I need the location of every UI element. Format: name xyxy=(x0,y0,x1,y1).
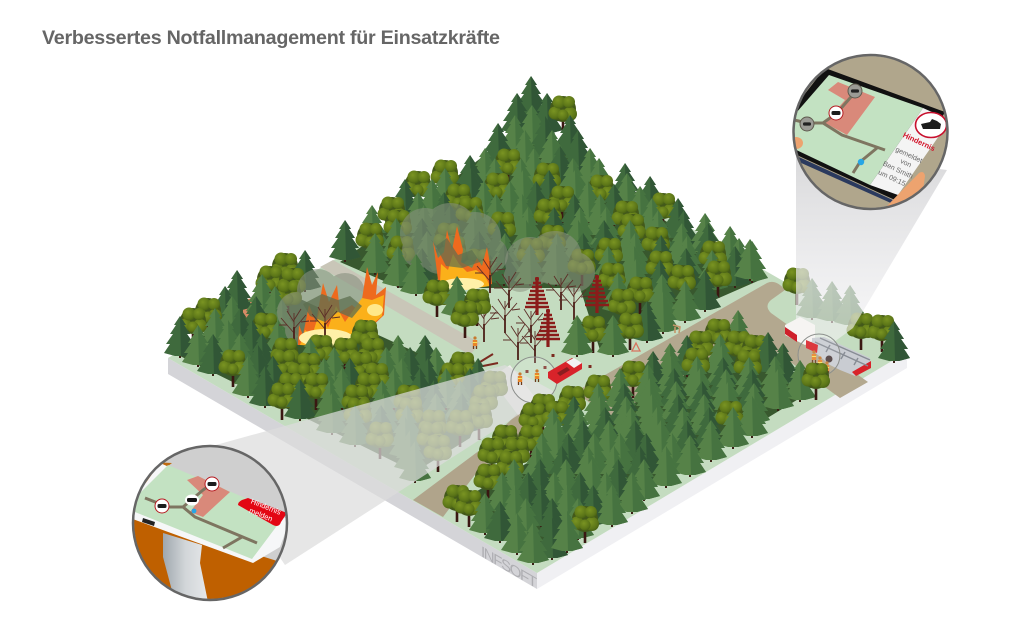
sleeve xyxy=(134,520,276,599)
routes xyxy=(796,96,886,174)
forest: front xyxy=(442,310,830,565)
forest underlay xyxy=(178,120,805,560)
report button: melden xyxy=(248,506,274,523)
building xyxy=(187,476,230,517)
panel text: gemeldet xyxy=(894,146,923,165)
forest: right corner xyxy=(782,268,910,363)
house roof in forest xyxy=(243,298,258,320)
road: south-west xyxy=(413,395,545,517)
fire: left xyxy=(298,267,386,347)
ridge path xyxy=(320,260,480,355)
road: junction xyxy=(490,365,537,415)
panel text: Ben Smith xyxy=(882,161,914,181)
obstacle icon xyxy=(916,112,946,138)
route markers xyxy=(800,84,864,165)
marker: warning triangle xyxy=(632,343,640,351)
magnifier: engine xyxy=(798,334,840,376)
title: Verbessertes Notfallmanagement für Einsatzkräfte xyxy=(42,27,500,49)
panel text xyxy=(878,132,935,186)
info panel xyxy=(870,108,950,195)
smoke cloud: clearing xyxy=(504,231,595,292)
clearing: red dead conifers xyxy=(525,275,609,347)
panel text: Hindernis xyxy=(901,130,937,153)
magnifier: clearing xyxy=(511,357,557,403)
smoke cloud: right fire xyxy=(400,203,508,275)
tablet body xyxy=(790,68,945,200)
magnifier: tablet xyxy=(794,56,946,208)
panel text: um 09:15 xyxy=(877,169,906,188)
fire engine with ladder xyxy=(785,317,871,376)
platform base xyxy=(168,140,907,589)
forest: left, behind fire xyxy=(164,250,321,367)
tablet edge xyxy=(799,157,893,203)
building xyxy=(825,82,875,135)
magnifier ring: tablet xyxy=(794,55,948,209)
panel text: von xyxy=(899,158,912,169)
route markers xyxy=(155,477,219,513)
clearing: green trees xyxy=(400,254,593,357)
strap xyxy=(163,533,208,602)
phone screen xyxy=(130,465,285,559)
burnt trees at left fire xyxy=(279,305,340,345)
map screen xyxy=(790,75,923,185)
clearing: fallen logs, stumps xyxy=(480,354,590,373)
fire: right xyxy=(433,226,492,290)
routes xyxy=(145,480,257,548)
forest: left, front of fire xyxy=(197,320,508,483)
firefighter near logs xyxy=(473,336,477,349)
phone body xyxy=(130,463,290,563)
phone button xyxy=(142,518,155,526)
firefighters at magnifier xyxy=(518,369,539,385)
magnifier: phone xyxy=(134,447,286,599)
forest: mountain xyxy=(329,76,768,357)
smoke cloud: left fire xyxy=(277,269,365,345)
projection beam: top-right tablet xyxy=(796,150,947,345)
fire truck: small xyxy=(548,358,582,384)
projection beam: bottom-left phone xyxy=(205,365,555,565)
clearing: burnt trees xyxy=(469,257,589,363)
report button: Hindernis xyxy=(250,497,283,517)
magnifier ring: phone xyxy=(133,446,287,600)
road: north-east and truck access xyxy=(575,282,868,425)
firefighters at engine xyxy=(812,350,829,374)
fingers xyxy=(887,172,925,206)
logo: infsoft: INFSOFT xyxy=(481,543,537,592)
deer xyxy=(673,325,680,333)
report button xyxy=(238,497,287,526)
